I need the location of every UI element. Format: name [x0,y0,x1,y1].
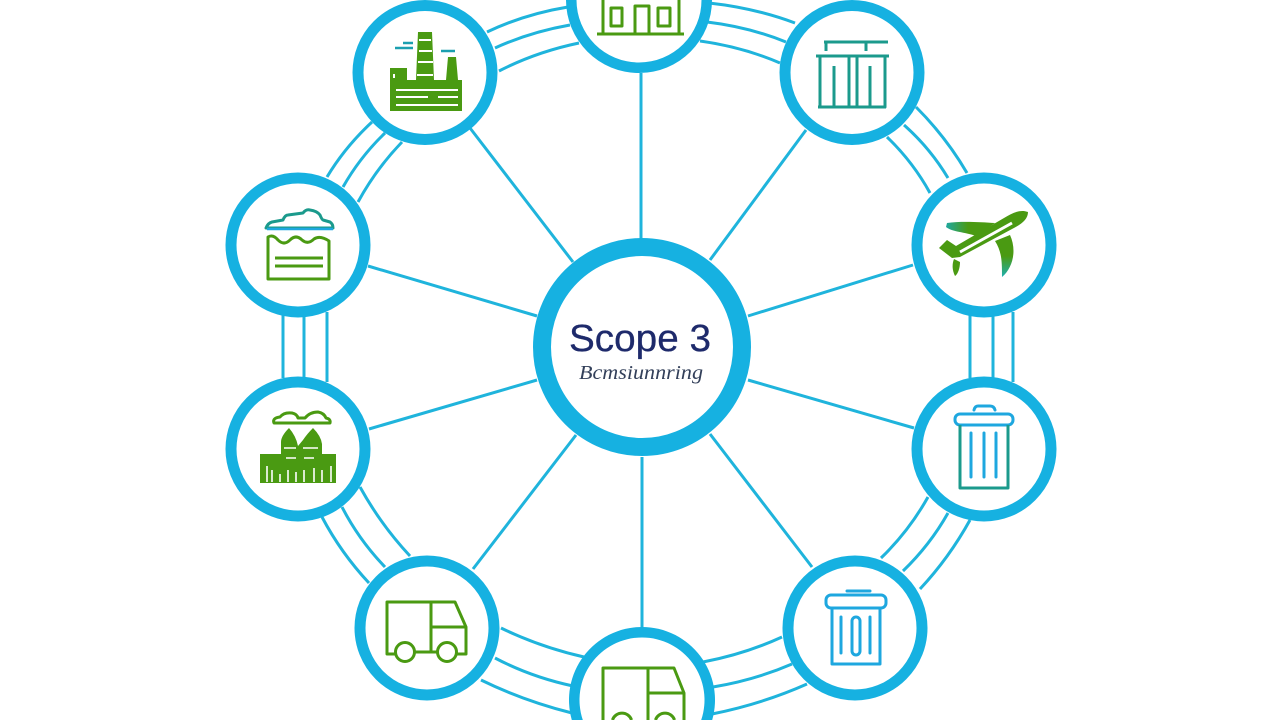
subtitle: Bcmsiunnring [579,362,703,384]
icon: airplane [939,211,1028,277]
icon: cloud over landscape panel [266,210,333,279]
heading: Scope 3: Scope 3 [569,318,711,360]
icon: building [597,0,684,34]
node: top building [566,0,712,73]
node: top-right teal facility [785,6,919,140]
node: bottom-right trash bin [788,561,922,695]
node: top-left factory [358,6,492,140]
icon: trash bin [955,406,1013,488]
node: left-upper landscape [231,178,365,312]
node: right airplane [917,178,1051,312]
icon: delivery truck [603,668,684,720]
icon: trash bin [826,591,886,664]
icon: twin tanks [816,42,889,107]
central hub: Scope 3 [542,247,742,447]
node: bottom truck [569,627,715,720]
node: left-lower landmark [231,382,365,516]
icon: factory [390,32,462,111]
node: bottom-left truck [360,561,494,695]
icon: delivery truck [387,602,466,662]
spokes connecting hub to nodes [368,73,914,629]
node: right trash bin [917,382,1051,516]
icon: landmark building [260,412,336,483]
triple outer ring connecting nodes [283,3,1013,714]
